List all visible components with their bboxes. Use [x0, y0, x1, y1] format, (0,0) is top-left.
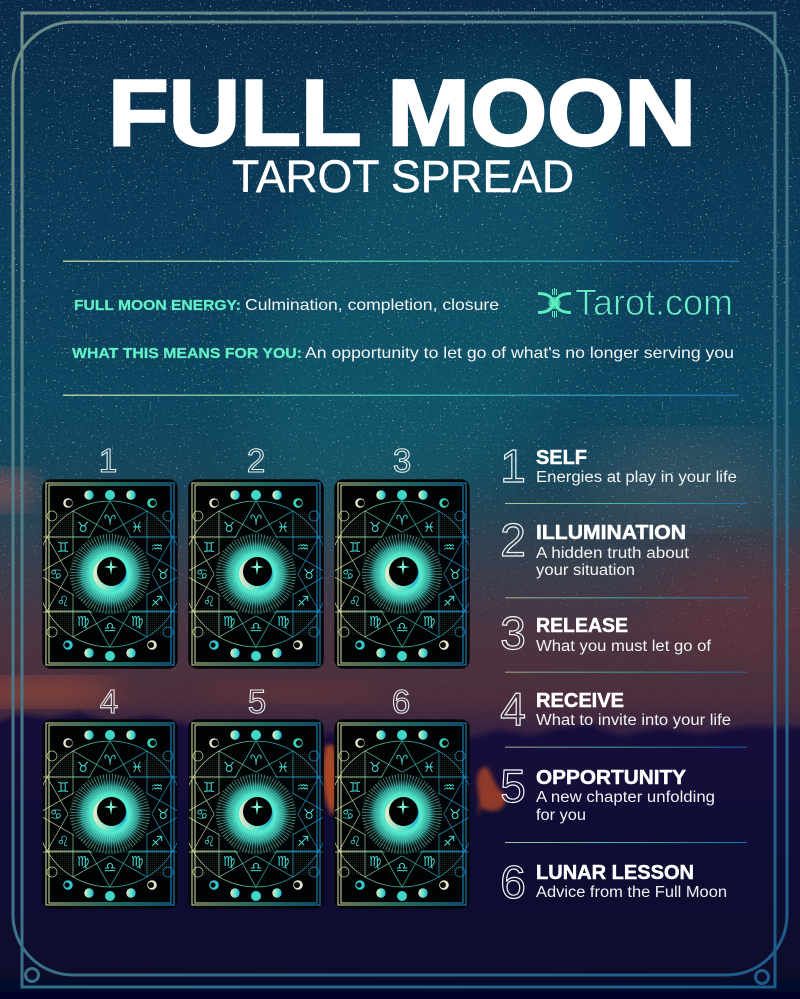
- card 1 with number: ♎: [104, 620, 116, 636]
- card 3 with number: ♈: [396, 513, 409, 529]
- card 2 with number: ♋: [196, 567, 208, 583]
- card 6 with number: ♓: [423, 760, 435, 776]
- card 4 with number: [37, 683, 183, 908]
- card 2 with number: ♍: [277, 614, 289, 630]
- legend item 1: self: 1: [500, 440, 526, 492]
- card 4 with number: ♉: [77, 760, 89, 776]
- card 5 with number: ♋: [196, 807, 208, 823]
- card 5 with number: ♈: [250, 753, 263, 769]
- card 2 with number: ♈: [250, 513, 263, 529]
- legend item 4: receive: What to invite into your life: [536, 712, 731, 729]
- card 6 with number: ♋: [342, 807, 354, 823]
- card 3 with number: ♓: [423, 520, 435, 536]
- icon: triple moon: [538, 288, 571, 318]
- legend item 6: lunar lesson: [500, 856, 727, 908]
- card 2 with number: ♌: [203, 594, 215, 610]
- legend item 5: opportunity: [500, 760, 715, 824]
- card 2 with number: [183, 442, 329, 668]
- card 3 with number: [329, 442, 475, 668]
- card 6 with number: ♎: [396, 860, 408, 876]
- card 3 with number: ♌: [349, 594, 361, 610]
- card 4 with number: ♎: [104, 860, 116, 876]
- card 5 with number: ♎: [250, 860, 262, 876]
- legend item 5: opportunity: OPPORTUNITY: [536, 767, 687, 789]
- full moon energy line: FULL MOON ENERGY:: [74, 298, 241, 314]
- card 2 with number: ♒: [297, 540, 309, 556]
- card 2 with number: ♉: [303, 567, 315, 583]
- legend item 2: illumination: A hidden truth about: [536, 545, 690, 562]
- card 3 with number: ♉: [449, 567, 461, 583]
- card 2 with number: 2: [247, 442, 265, 479]
- card 4 with number: ♐: [151, 834, 163, 850]
- card 3 with number: ♊: [349, 540, 361, 556]
- card 2 with number: ♐: [297, 594, 309, 610]
- card 2 with number: ♊: [203, 540, 215, 556]
- card 1 with number: ♌: [57, 594, 69, 610]
- legend item 6: lunar lesson: 6: [500, 856, 526, 908]
- legend item 5: opportunity: for you: [536, 807, 586, 824]
- card 5 with number: [183, 683, 329, 908]
- legend item 4: receive: [500, 683, 731, 735]
- card 3 with number: ♉: [369, 520, 381, 536]
- card 2 with number: ♎: [250, 620, 262, 636]
- card 4 with number: ♒: [151, 780, 163, 796]
- card 1 with number: ♊: [57, 540, 69, 556]
- legend item 3: release: What you must let go of: [536, 638, 712, 655]
- legend item 5: opportunity: A new chapter unfolding: [536, 789, 715, 806]
- card 4 with number: 4: [100, 683, 118, 720]
- info block: [72, 297, 734, 362]
- card 4 with number: ♍: [77, 854, 89, 870]
- legend item 4: receive: RECEIVE: [536, 690, 624, 712]
- legend item 2: illumination: [500, 514, 690, 579]
- card 1 with number: ♍: [131, 614, 143, 630]
- card 5 with number: ♐: [297, 834, 309, 850]
- legend item 1: self: SELF: [536, 447, 587, 469]
- card 6 with number: ♈: [396, 753, 409, 769]
- card 6 with number: ♒: [443, 780, 455, 796]
- title: [108, 60, 696, 202]
- legend item 2: illumination: your situation: [536, 562, 635, 579]
- card 1 with number: 1: [99, 442, 117, 479]
- card 1 with number: [37, 442, 183, 668]
- card 4 with number: ♈: [104, 753, 117, 769]
- card 2 with number: ♓: [277, 520, 289, 536]
- card 5 with number: ♉: [303, 807, 315, 823]
- card 4 with number: ♍: [131, 854, 143, 870]
- card 3 with number: ♒: [443, 540, 455, 556]
- card 6 with number: ♉: [449, 807, 461, 823]
- card 5 with number: ♌: [203, 834, 215, 850]
- card 5 with number: ♊: [203, 780, 215, 796]
- card 1 with number: ♒: [151, 540, 163, 556]
- legend item 2: illumination: 2: [500, 514, 526, 566]
- card 1 with number: ♉: [77, 520, 89, 536]
- card 5 with number: 5: [248, 683, 266, 720]
- card 6 with number: ♉: [369, 760, 381, 776]
- card 3 with number: ♎: [396, 620, 408, 636]
- card 4 with number: ♌: [57, 834, 69, 850]
- legend item 1: self: Energies at play in your life: [536, 469, 737, 486]
- card 5 with number: ♍: [277, 854, 289, 870]
- legend item 2: illumination: ILLUMINATION: [536, 522, 686, 544]
- divider: [63, 260, 739, 262]
- legend item 5: opportunity: 5: [500, 760, 526, 812]
- card 6 with number: ♍: [369, 854, 381, 870]
- card 6 with number: ♌: [349, 834, 361, 850]
- card 1 with number: ♓: [131, 520, 143, 536]
- card 6 with number: ♍: [423, 854, 435, 870]
- what this means line: [72, 345, 734, 362]
- card 4 with number: ♉: [157, 807, 169, 823]
- card 1 with number: ♉: [157, 567, 169, 583]
- card 1 with number: ♋: [50, 567, 62, 583]
- card 4 with number: ♋: [50, 807, 62, 823]
- card 3 with number: ♐: [443, 594, 455, 610]
- card 2 with number: ♍: [223, 614, 235, 630]
- card 1 with number: ♐: [151, 594, 163, 610]
- wordmark: Tarot.com: [575, 282, 733, 323]
- what this means line: An opportunity to let go of what's no longer serving you: [305, 345, 734, 362]
- full moon energy line: Culmination, completion, closure: [245, 297, 499, 314]
- legend item 6: lunar lesson: Advice from the Full Moon: [536, 884, 727, 901]
- card 3 with number: ♍: [423, 614, 435, 630]
- card 3 with number: ♍: [369, 614, 381, 630]
- legend item 1: self: [500, 440, 737, 492]
- full moon energy line: [74, 297, 499, 314]
- card 1 with number: ♍: [77, 614, 89, 630]
- card 6 with number: 6: [392, 683, 410, 720]
- card 4 with number: ♊: [57, 780, 69, 796]
- card 6 with number: ♐: [443, 834, 455, 850]
- card 5 with number: ♒: [297, 780, 309, 796]
- card 3 with number: 3: [393, 442, 411, 479]
- card 2 with number: ♉: [223, 520, 235, 536]
- card 4 with number: ♓: [131, 760, 143, 776]
- what this means line: WHAT THIS MEANS FOR YOU:: [72, 345, 302, 362]
- card 1 with number: ♈: [104, 513, 117, 529]
- card 6 with number: ♊: [349, 780, 361, 796]
- card 5 with number: ♍: [223, 854, 235, 870]
- divider: [63, 394, 739, 396]
- legend item 4: receive: 4: [500, 683, 526, 735]
- logo: Tarot.com: [538, 282, 733, 323]
- card 5 with number: ♉: [223, 760, 235, 776]
- legend item 6: lunar lesson: LUNAR LESSON: [536, 862, 694, 884]
- subheading: tarot spread: TAROT SPREAD: [232, 151, 574, 202]
- legend item 3: release: RELEASE: [536, 615, 628, 637]
- card 6 with number: [329, 683, 475, 908]
- legend item 3: release: [500, 607, 712, 659]
- heading: full moon: FULL MOON: [108, 60, 696, 165]
- card 3 with number: ♋: [342, 567, 354, 583]
- legend item 3: release: 3: [500, 607, 526, 659]
- card 5 with number: ♓: [277, 760, 289, 776]
